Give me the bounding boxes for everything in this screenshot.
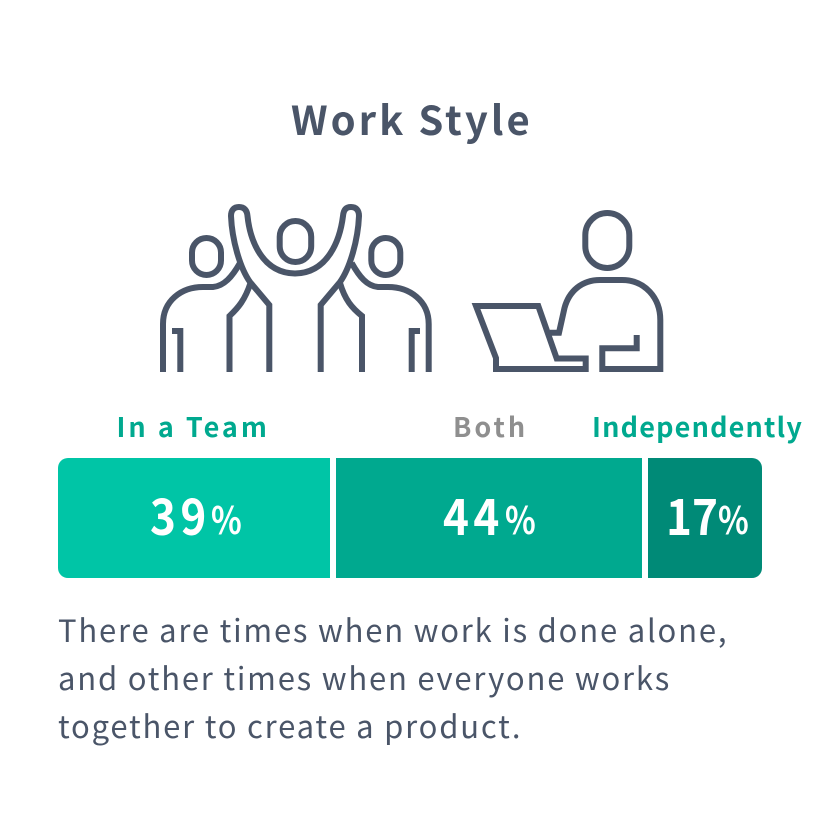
segment: independently 17%	[648, 458, 762, 578]
segment: both 44%	[336, 458, 642, 578]
value: 17%: %	[718, 490, 748, 545]
label: Independently: Independently	[592, 406, 803, 445]
stacked bar chart	[58, 458, 762, 578]
description text: together to create a product.	[58, 702, 522, 747]
description text: There are times when work is done alone,	[58, 606, 728, 651]
description text	[58, 606, 728, 747]
icon: person at laptop	[472, 210, 664, 372]
value: 17%: 17	[666, 478, 718, 550]
value: 39%: 39	[150, 478, 210, 550]
value: 39%: %	[210, 490, 241, 545]
label: In a Team: In a Team	[116, 406, 270, 445]
title: Work Style	[291, 89, 533, 147]
icon: team celebrating	[160, 204, 432, 372]
label: Both: Both	[453, 406, 528, 445]
value: 17%	[666, 478, 748, 550]
description text: and other times when everyone works	[58, 654, 671, 699]
segment: in a team 39%	[58, 458, 330, 578]
value: 44%	[442, 478, 535, 550]
value: 44%: 44	[442, 478, 503, 550]
value: 44%: %	[504, 490, 535, 545]
value: 39%	[150, 478, 241, 550]
